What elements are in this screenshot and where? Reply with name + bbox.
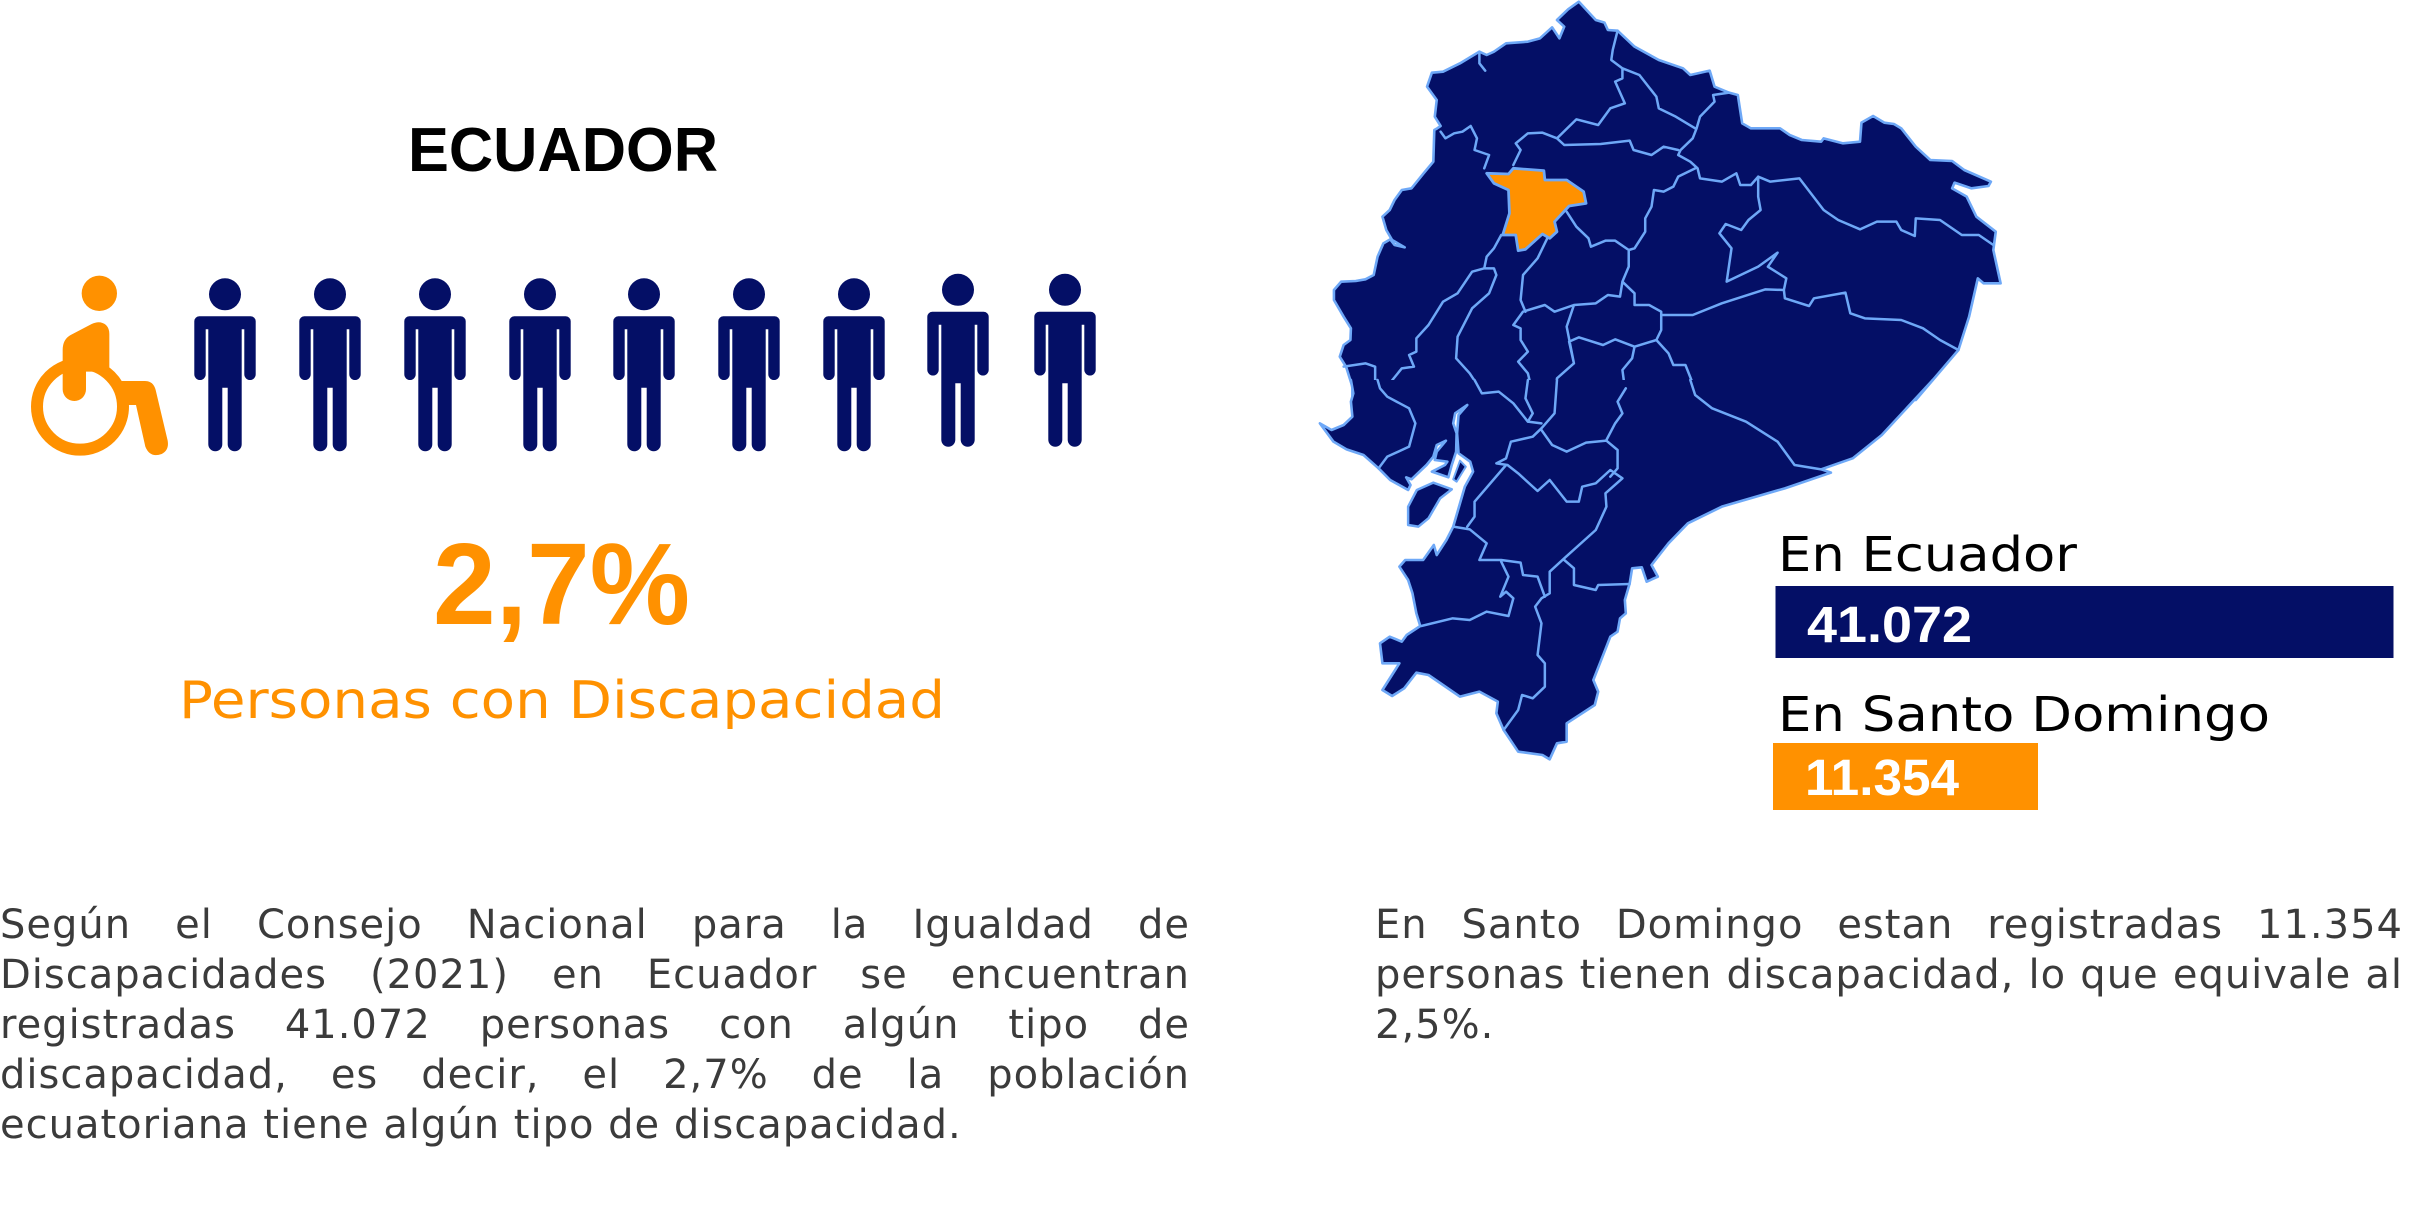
title: ECUADOR: ECUADOR bbox=[408, 116, 718, 185]
map south fill and coast bbox=[1320, 380, 1933, 759]
icon: navy person 7 bbox=[823, 278, 885, 451]
text block: Ecuador description: ecuatoriana tiene algún tipo de discapacidad. bbox=[0, 1102, 962, 1148]
icon: navy person 3 bbox=[404, 278, 466, 451]
icon: navy person 9 bbox=[1034, 274, 1096, 447]
icon: orange wheelchair user bbox=[37, 276, 168, 455]
icon: navy person 5 bbox=[613, 278, 675, 451]
bar: En Ecuador 41.072: 41.072 bbox=[1807, 596, 1972, 653]
icon: navy person 4 bbox=[509, 278, 571, 451]
map: Ecuador provinces bbox=[1320, 2, 2001, 759]
small island bbox=[1453, 461, 1466, 482]
bar: En Santo Domingo 11.354: 11.354 bbox=[1805, 749, 1960, 806]
icon: navy person 2 bbox=[299, 278, 361, 451]
icon: navy person 1 bbox=[194, 278, 256, 451]
text block: Santo Domingo description bbox=[1375, 902, 2403, 1048]
text block: Santo Domingo description: En Santo Domingo estan registradas 11.354 bbox=[1375, 902, 2403, 948]
text block: Santo Domingo description: 2,5%. bbox=[1375, 1002, 1494, 1048]
icon: navy person 6 bbox=[718, 278, 780, 451]
text block: Ecuador description: Discapacidades (2021) en Ecuador se encuentran bbox=[0, 952, 1190, 998]
label: En Ecuador: En Ecuador bbox=[1778, 527, 2077, 583]
text block: Ecuador description: discapacidad, es decir, el 2,7% de la población bbox=[0, 1052, 1190, 1098]
island: Puna bbox=[1408, 483, 1452, 527]
bar: En Ecuador 41.072 bbox=[1776, 586, 2394, 658]
map north fill and coast bbox=[1334, 2, 2001, 400]
big percentage: 2,7% bbox=[433, 519, 690, 649]
text block: Ecuador description bbox=[0, 902, 1190, 1148]
text block: Santo Domingo description: personas tienen discapacidad, lo que equivale al bbox=[1375, 952, 2403, 998]
icon: navy person 8 bbox=[927, 274, 989, 447]
text block: Ecuador description: Según el Consejo Nacional para la Igualdad de bbox=[0, 902, 1190, 948]
Santo Domingo province highlight bbox=[1487, 168, 1586, 251]
bar: En Santo Domingo 11.354 bbox=[1773, 743, 2038, 810]
icon row: people with disability ratio bbox=[37, 274, 1096, 455]
text block: Ecuador description: registradas 41.072 personas con algún tipo de bbox=[0, 1002, 1190, 1048]
label: En Santo Domingo: En Santo Domingo bbox=[1778, 687, 2270, 743]
subtitle: Personas con Discapacidad: Personas con Discapacidad bbox=[179, 671, 945, 731]
